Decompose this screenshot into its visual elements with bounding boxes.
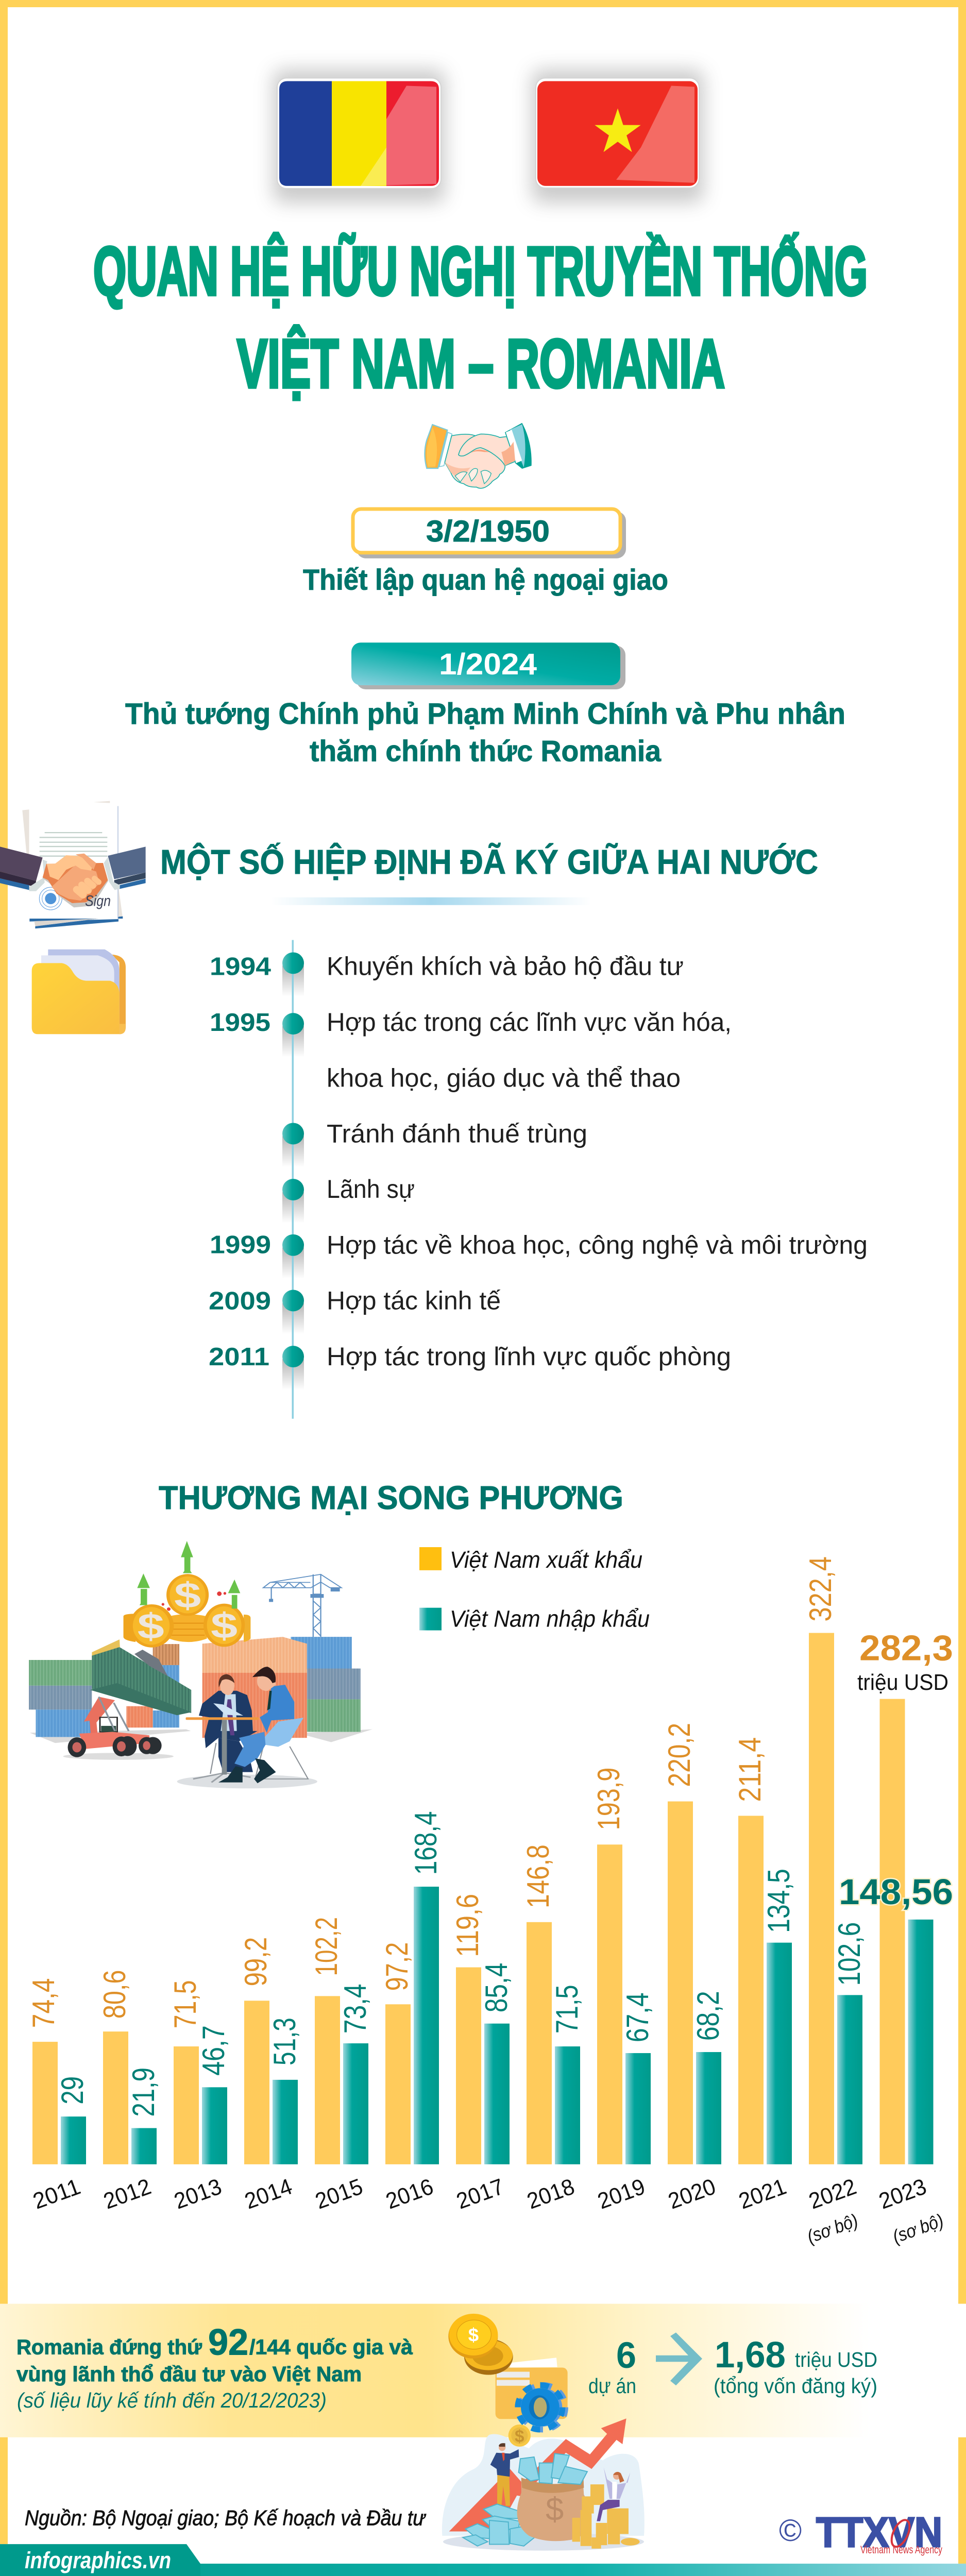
text: official visit: thăm chính thức Romania [310,735,662,768]
flag: Vietnam [532,70,704,203]
coin stacks: $ [174,1575,201,1616]
timeline years: 2011 [209,1343,269,1371]
stat: projects: dự án [588,2374,636,2398]
year group 2020: 68,2 [691,1991,725,2041]
small coin: $ [515,2427,524,2446]
timeline items: Hợp tác kinh tế [327,1286,501,1315]
year group 2015: 102,2 [309,1917,344,1976]
small coin [509,2425,531,2447]
year group 2018 [521,1844,584,2214]
coin stacks: $ [211,1605,238,1646]
source: Nguồn: Bộ Ngoại giao; Bộ Kế hoạch và Đầu tư [25,2505,427,2530]
stat: registered capital: (tổng vốn đăng ký) [714,2374,877,2398]
investment ranking text [16,2321,413,2386]
year group 2023 [839,1628,953,2247]
icon: signing handshake on document: Sign [85,893,111,910]
tablet [213,1703,243,1716]
year group 2012 [97,1970,161,2214]
flag: Romania [273,70,445,203]
cash pile [463,2504,537,2546]
timeline years: 1995 [210,1009,270,1037]
folder [496,2368,568,2419]
year group 2020: 220,2 [662,1723,697,1787]
year group 2013: 2013 [171,2174,225,2214]
seated man in navy [199,1691,258,1748]
timeline items: khoa học, giáo dục và thể thao [327,1064,681,1093]
year group 2013: 71,5 [168,1980,202,2028]
title [93,232,868,402]
stacked containers, left [29,1660,92,1686]
pale background blobs [442,2434,645,2536]
seated woman [597,2467,630,2521]
year group 2017 [450,1894,514,2214]
year group 2021: 2021 [735,2174,790,2214]
year group 2012: 80,6 [97,1970,132,2019]
year group 2019: 2019 [594,2174,649,2214]
year group 2023: (sơ bộ) [890,2210,946,2247]
blue gear [518,2385,565,2430]
gold coins [448,2314,513,2375]
text: official visit [125,698,845,768]
year group 2022: 2022 [805,2174,860,2214]
illustration: growth, money bag and investors [442,2314,645,2551]
timeline axis [292,940,294,1419]
date badge: 3/2/1950 [353,509,626,558]
timeline items: Hợp tác về khoa học, công nghệ và môi trường [327,1231,868,1260]
timeline years: 2009 [209,1287,271,1315]
date badge: 1/2024: 1/2024 [439,648,537,681]
timeline years: 1999 [210,1231,271,1259]
year group 2014 [239,1937,302,2214]
red dots [162,1591,226,1611]
year group 2022: (sơ bộ) [804,2210,861,2247]
year group 2021: 134,5 [761,1869,796,1933]
coin stacks [572,2484,640,2549]
logo: TTXVN: © [779,2513,802,2548]
year group 2015 [309,1917,372,2214]
forklift [84,1697,115,1735]
timeline items: Lãnh sự [327,1175,415,1204]
arrow [656,2332,702,2385]
icon: signing handshake on document [0,801,146,928]
table [186,1717,259,1720]
year group 2020 [662,1723,725,2214]
heading: agreements: MỘT SỐ HIỆP ĐỊNH ĐÃ KÝ GIỮA HAI NƯỚC [160,842,818,882]
year group 2016 [380,1811,443,2214]
heading underline glow [271,897,591,905]
legend: export: Việt Nam xuất khẩu [450,1546,642,1573]
stacked containers, right [291,1637,352,1669]
year group 2019: 193,9 [591,1768,626,1830]
year group 2013: 46,7 [196,2025,231,2076]
year group 2018: 2018 [523,2174,578,2214]
money sack [517,2453,591,2541]
timeline of agreements [209,940,868,1419]
icon: folder [32,950,126,1034]
icon: handshake [425,423,532,488]
stat: registered capital: 1,68 [715,2334,786,2376]
investment band [0,2304,966,2437]
year group 2018: 71,5 [550,1985,584,2033]
year group 2015: 2015 [312,2174,366,2214]
stat: registered capital [714,2334,877,2398]
timeline years: 1994 [210,953,271,980]
year group 2022: 102,6 [832,1922,867,1986]
year group 2021: 211,4 [733,1737,767,1802]
gold coins: $ [468,2325,479,2346]
year group 2022 [803,1556,867,2247]
year group 2022: 322,4 [803,1556,838,1622]
year group 2016: 2016 [382,2174,437,2214]
text: diplomatic relations: Thiết lập quan hệ ngoại giao [303,564,668,597]
year group 2014: 2014 [241,2174,296,2214]
year group 2016: 168,4 [409,1811,443,1875]
timeline items: Tránh đánh thuế trùng [327,1119,587,1148]
timeline items: Hợp tác trong các lĩnh vực văn hóa, [327,1008,732,1037]
rising red arrow [449,2418,626,2532]
date badge: 3/2/1950: 3/2/1950 [426,515,550,548]
year group 2011: 74,4 [26,1978,61,2028]
year group 2016: 97,2 [380,1942,414,1991]
chair [259,1718,303,1747]
investment ranking text: Romania đứng thứ [16,2335,202,2359]
timeline items: Khuyến khích và bảo hộ đầu tư [327,952,684,980]
timeline items: Hợp tác trong lĩnh vực quốc phòng [327,1342,731,1371]
logo: TTXVN: Vietnam News Agency [860,2544,942,2556]
year group 2017: 119,6 [450,1894,485,1957]
coin stacks: $ [138,1606,164,1647]
year group 2020: 2020 [665,2174,719,2214]
year group 2011 [26,1978,90,2214]
standing man in blue [260,1685,294,1733]
year group 2023: triệu USD [857,1670,948,1695]
money sack: $ [546,2492,564,2528]
bar chart: trade 2011-2023 [26,1556,953,2247]
footer bar [0,2564,966,2576]
year group 2014: 51,3 [267,2018,302,2065]
illustration: trade, containers and coins [29,1541,372,1788]
year group 2021 [733,1737,796,2214]
ground shadows [30,1730,372,1743]
year group 2012: 21,9 [126,2067,161,2117]
tower crane [263,1574,342,1637]
timeline years [209,953,271,1371]
legend: import: Việt Nam nhập khẩu [450,1605,650,1632]
heading: bilateral trade: THƯƠNG MẠI SONG PHƯƠNG [159,1479,623,1516]
year group 2017: 85,4 [479,1963,514,2012]
investment ranking text: vùng lãnh thổ đầu tư vào Việt Nam [16,2362,362,2386]
year group 2012: 2012 [100,2174,155,2214]
timeline items [327,952,868,1371]
year group 2018: 146,8 [521,1844,555,1908]
timeline dots [282,952,304,1367]
investment ranking text: 92 [208,2321,248,2363]
year group 2013 [168,1980,231,2214]
stat: projects [588,2335,636,2398]
timeline shadows [282,965,304,1390]
date badge: 1/2024 [351,642,625,689]
logo: TTXVN: TTXVN [816,2509,942,2556]
year group 2014: 99,2 [239,1937,273,1986]
year group 2015: 73,4 [338,1984,372,2033]
year group 2011: 29 [55,2076,90,2105]
man with coin [490,2443,519,2506]
hoisted container [92,1639,120,1657]
title: VIỆT NAM – ROMANIA [237,326,725,402]
year group 2023: 148,56 [839,1872,953,1912]
stat: registered capital: triệu USD [795,2348,877,2371]
coin stacks [124,1574,250,1648]
text: official visit: Thủ tướng Chính phủ Phạm Minh Chính và Phu nhân [125,698,845,731]
data note: (số liệu lũy kế tính đến 20/12/2023) [17,2388,327,2412]
year group 2011: 2011 [29,2174,84,2214]
year group 2019: 67,4 [620,1992,655,2042]
year group 2019 [591,1768,655,2214]
investment ranking text: /144 quốc gia và [249,2335,413,2359]
footer tab: infographics.vn: infographics.vn [25,2547,171,2573]
year group 2023: 282,3 [859,1628,953,1668]
chair and table legs [210,1743,308,1779]
green arrows [137,1541,240,1608]
year group 2017: 2017 [453,2174,507,2214]
year group 2023: 2023 [875,2174,930,2214]
stat: projects: 6 [616,2335,636,2376]
